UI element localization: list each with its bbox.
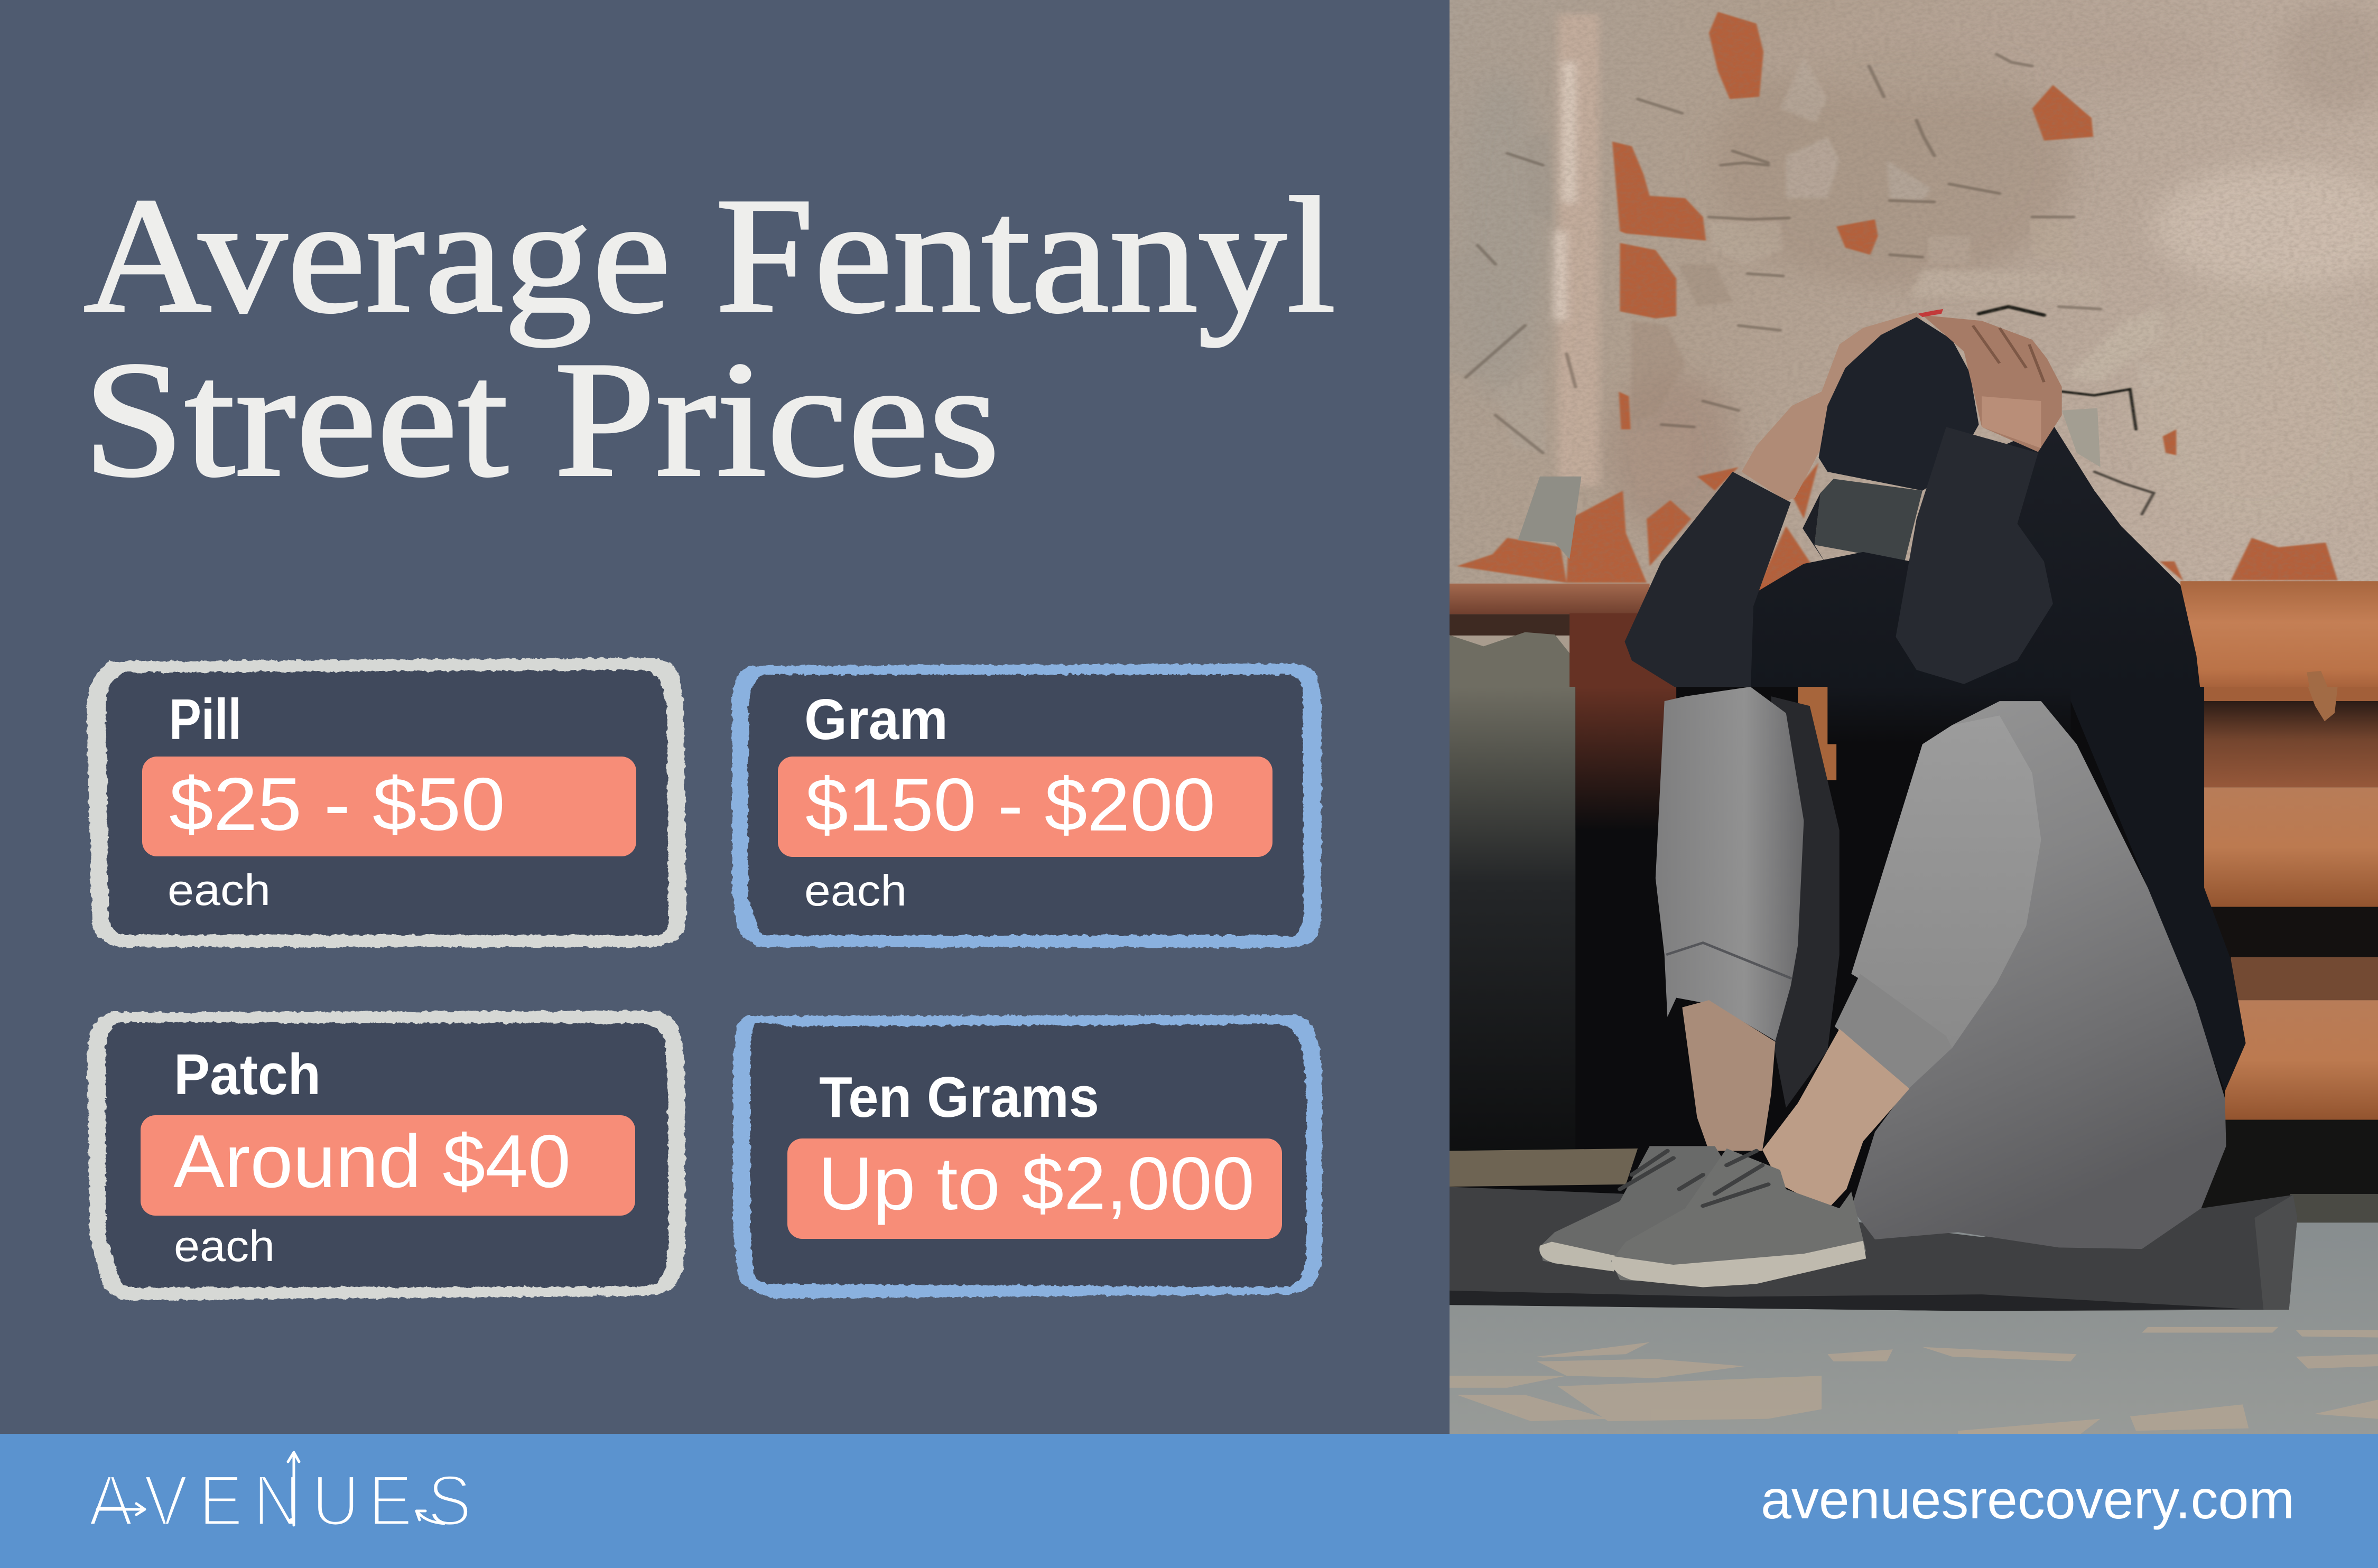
right cuff bbox=[1835, 974, 1952, 1090]
left leg shadow side bbox=[1771, 696, 1840, 1108]
website address: avenuesrecovery.com bbox=[1761, 1469, 2295, 1530]
price text: Up to $2,000 bbox=[818, 1142, 1255, 1226]
raised shin fabric bbox=[1851, 715, 2041, 1048]
left cuff seam bbox=[1666, 942, 1792, 978]
debris tube bbox=[1448, 1149, 1638, 1187]
lower left wall bbox=[1448, 632, 1575, 740]
orange gap behind legs bbox=[1798, 687, 1836, 780]
price pill bbox=[141, 1115, 635, 1216]
title: Street Prices bbox=[83, 327, 1000, 511]
dark cracks bbox=[1979, 306, 2154, 514]
nails bbox=[1918, 309, 1943, 317]
left shin bbox=[1682, 1000, 1776, 1151]
left shoe upper bbox=[1540, 1146, 1727, 1271]
card fill bbox=[106, 670, 668, 936]
lower photo: legs, shoes, mat, floor bbox=[1448, 687, 2378, 1438]
logo arrows bbox=[97, 1452, 444, 1525]
label: Ten Grams: Ten Grams bbox=[819, 1065, 1099, 1130]
card fill bbox=[106, 1022, 668, 1287]
sleeve: right bbox=[1896, 427, 2053, 684]
hip and thigh bbox=[1851, 701, 2226, 1249]
price pill bbox=[778, 757, 1272, 857]
hood bbox=[1819, 317, 1979, 491]
price pill bbox=[142, 757, 636, 856]
card border: blue bbox=[732, 664, 1322, 948]
left leg bbox=[1656, 687, 1804, 1041]
panel: ten grams price card bbox=[733, 1015, 1322, 1299]
dark background bbox=[1448, 687, 2378, 1213]
each: each bbox=[174, 1221, 275, 1271]
peeling plaster wall bbox=[1596, 0, 2378, 586]
card border: grey bbox=[87, 658, 686, 947]
bolt bbox=[2308, 687, 2338, 721]
laces bbox=[1620, 1151, 1768, 1206]
card fill bbox=[748, 675, 1304, 937]
title: Average Fentanyl bbox=[83, 163, 1336, 348]
each: each bbox=[168, 865, 271, 914]
logo: Avenues bbox=[89, 1452, 471, 1541]
label: Pill: Pill bbox=[169, 687, 241, 752]
exposed bricks bbox=[1457, 12, 2338, 597]
price pill bbox=[787, 1138, 1282, 1239]
panel: gram price card bbox=[732, 664, 1322, 948]
floor bbox=[1448, 1208, 2378, 1438]
title bbox=[83, 163, 1336, 511]
right pipe bbox=[2180, 581, 2378, 699]
price text: Around $40 bbox=[173, 1119, 571, 1203]
floor patches bbox=[1448, 1327, 2378, 1437]
card border: grey bbox=[87, 1011, 685, 1300]
hoodie hem bbox=[2065, 687, 2246, 1091]
pipe stack bbox=[2201, 687, 2378, 701]
footer band bbox=[0, 1434, 2378, 1568]
sleeve: left bbox=[1624, 472, 1791, 698]
each: each bbox=[804, 866, 907, 915]
price text: $150 - $200 bbox=[805, 763, 1215, 847]
label: Gram: Gram bbox=[804, 687, 948, 752]
card fill bbox=[750, 1023, 1306, 1287]
plaster chips bbox=[1633, 63, 1967, 391]
card border: blue bbox=[733, 1015, 1322, 1299]
right shoe upper bbox=[1611, 1149, 1866, 1285]
rusty patch bbox=[1569, 613, 1688, 740]
hand: right bbox=[1922, 315, 2062, 452]
cracks bbox=[1466, 54, 2101, 453]
hood rim bbox=[1815, 479, 1922, 562]
right shin and ankle bbox=[1762, 1029, 1909, 1209]
torso bbox=[1744, 425, 2206, 740]
shoes bbox=[1539, 1146, 1866, 1287]
wordmark thinned with a band-coloured stroke: AVENUES bbox=[89, 1460, 471, 1541]
left panel background bbox=[0, 0, 1450, 1434]
pipe bolt bbox=[2307, 671, 2339, 722]
forearm: left bbox=[1742, 312, 1922, 501]
label: Patch: Patch bbox=[174, 1042, 321, 1107]
left wall in shadow bbox=[1448, 687, 1575, 1155]
panel: patch price card bbox=[87, 1011, 685, 1300]
wall grain bbox=[1448, 0, 2378, 583]
photo: hooded person sitting against a peeling brick wall bbox=[1448, 0, 2378, 1438]
price text: $25 - $50 bbox=[169, 762, 505, 846]
left pipe bbox=[1448, 584, 1650, 614]
upper photo: wall, pipes, hoodie bbox=[1448, 0, 2378, 742]
panel: pill price card bbox=[87, 658, 686, 947]
right shoe sole bbox=[1612, 1241, 1866, 1287]
grey plaster chip bbox=[1518, 477, 1582, 559]
mat bbox=[1448, 1187, 2297, 1311]
